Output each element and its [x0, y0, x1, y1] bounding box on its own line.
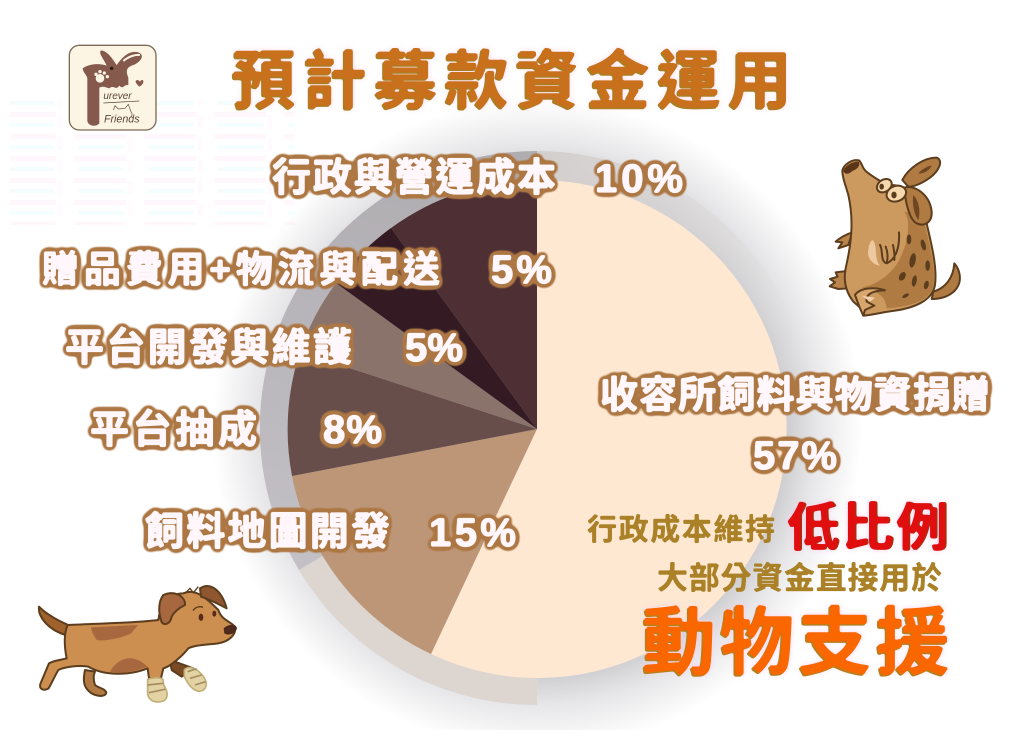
head ear: [159, 593, 185, 624]
eyes: [874, 176, 894, 195]
callout: low admin cost: 低比例: [787, 500, 948, 558]
body: [842, 160, 936, 316]
head side ear: [904, 187, 932, 225]
slice: 贈品費用+物流與配送 5%: [336, 228, 537, 429]
label: 贈品費用+物流與配送 5%: 贈品費用+物流與配送: [42, 249, 440, 290]
label: 收容所飼料與物資捐贈 57%: 收容所飼料與物資捐贈: [600, 375, 990, 417]
hind foot: [855, 288, 885, 316]
icon: sitting spotted dog: [830, 158, 960, 316]
label: 飼料地圖開發 15%: 飼料地圖開發: [145, 511, 390, 554]
callout: most funds go to: 大部分資金直接用於: [657, 561, 942, 596]
slice: 飼料地圖開發 15%: [292, 429, 537, 654]
body patches: [91, 625, 138, 640]
darker back and haunch: [862, 212, 934, 308]
callout: low admin cost: [587, 500, 948, 558]
spots: [907, 234, 911, 244]
slice: 平台開發與維護 5%: [300, 283, 537, 429]
near bandaged leg: [148, 678, 167, 702]
label: 收容所飼料與物資捐贈 57%: [600, 375, 990, 478]
front paws: [836, 232, 852, 248]
pie chart: [288, 180, 787, 678]
label: 收容所飼料與物資捐贈 57%: 57%: [753, 434, 837, 478]
icon: walking dog with bandaged legs: [39, 586, 237, 702]
label: 平台開發與維護 5%: 平台開發與維護: [65, 327, 352, 370]
ghost compression artefacts, upper left: [10, 100, 295, 225]
bandaged far leg: [184, 668, 206, 691]
label: 飼料地圖開發 15%: 15%: [429, 511, 516, 555]
body and back leg: [40, 592, 235, 690]
callout: animal support: 動物支援: [642, 601, 950, 684]
fur tuft: [185, 587, 198, 593]
label: 平台抽成 8%: [90, 408, 382, 452]
icon: Forever Friends logo: [69, 45, 156, 130]
tail: [932, 263, 960, 299]
arm tuft: [880, 232, 899, 263]
belly highlight: [868, 240, 880, 266]
icon: Forever Friends logo: urever: [103, 91, 132, 102]
icon: Forever Friends logo: Friends: [104, 113, 140, 125]
soft shadow glow behind pie: [212, 100, 862, 730]
label: 贈品費用+物流與配送 5%: 5%: [491, 248, 552, 292]
pie shadow ring: [260, 151, 814, 705]
slice: 收容所飼料與物資捐贈 57%: [431, 180, 787, 678]
label: 飼料地圖開發 15%: [145, 511, 516, 555]
label: 行政與營運成本 10%: 行政與營運成本: [272, 157, 556, 200]
eyes and brow: [199, 614, 203, 621]
title: 預計募款資金運用: [232, 45, 792, 117]
label: 平台開發與維護 5%: 5%: [405, 326, 463, 370]
nose: [224, 625, 237, 634]
tail: [39, 607, 68, 635]
callout: low admin cost: 行政成本維持: [587, 514, 775, 547]
label: 平台抽成 8%: 平台抽成: [90, 409, 257, 452]
slice: 平台抽成 8%: [288, 352, 537, 476]
slice: 行政與營運成本 10%: [391, 180, 537, 429]
label: 平台抽成 8%: 8%: [323, 408, 382, 452]
back ear: [200, 586, 227, 608]
far legs: [84, 670, 106, 696]
back ear: [902, 158, 940, 187]
label: 行政與營運成本 10%: 10%: [595, 157, 683, 201]
label: 行政與營運成本 10%: [272, 157, 683, 201]
nose: [843, 162, 859, 174]
